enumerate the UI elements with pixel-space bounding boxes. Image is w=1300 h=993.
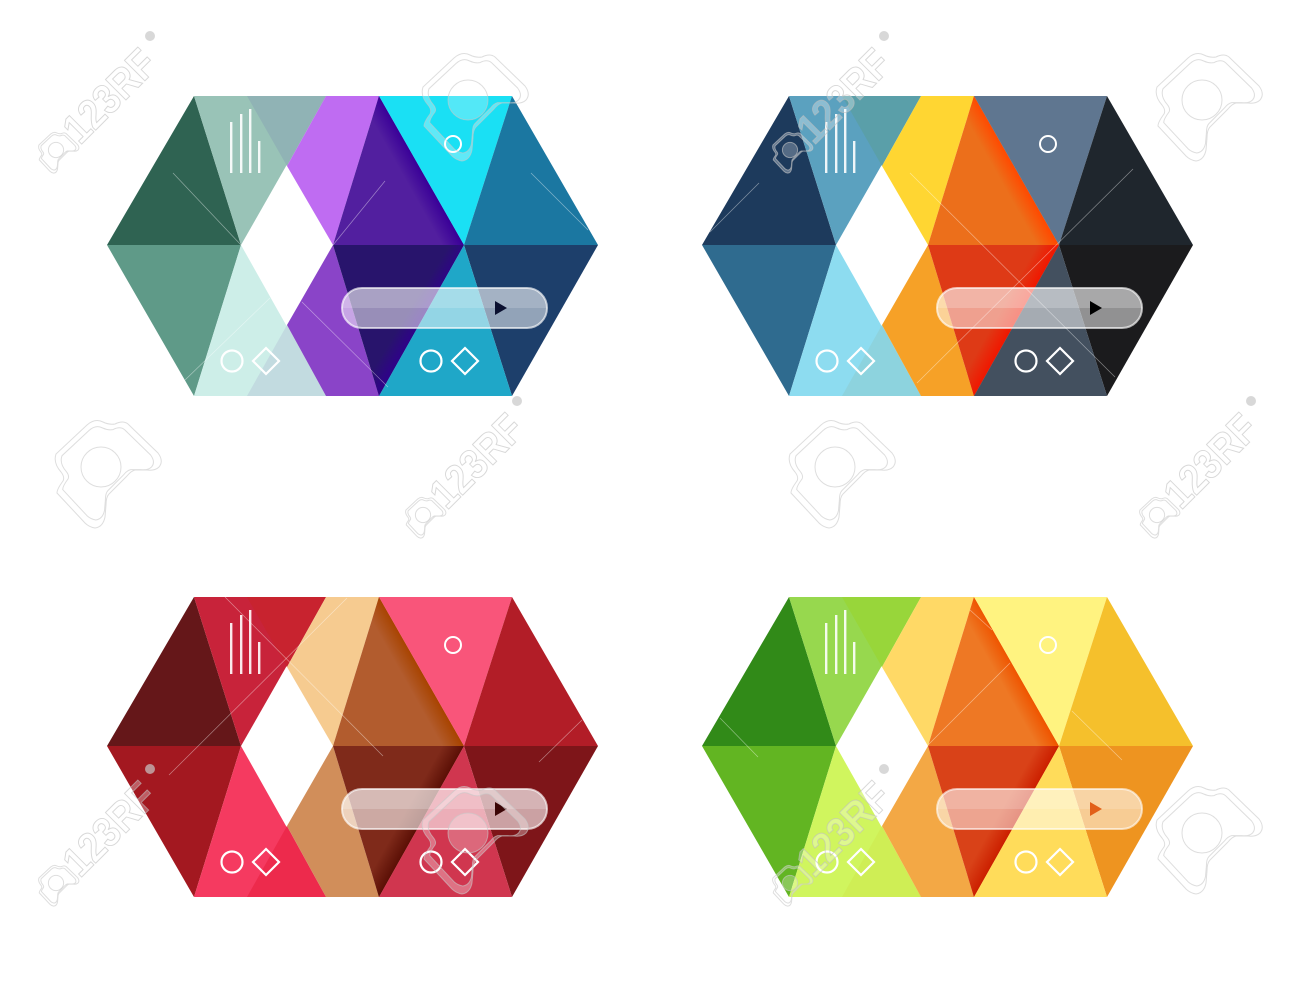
button: glass pill with play arrow: [937, 288, 1142, 328]
icon: small circle: [445, 637, 461, 653]
watermark: 123RF logo middle: 123RF: [420, 405, 533, 517]
icons: circle and diamond right: [1016, 849, 1073, 875]
panel: red and brown hexagon: [107, 597, 598, 897]
watermark: camera icon top middle: [422, 54, 528, 161]
icons: circle and diamond left: [816, 348, 874, 374]
centre facets: [882, 597, 1059, 897]
thin lines: [710, 169, 1133, 383]
watermark: 123RF logo bottom left: 123RF: [53, 773, 166, 885]
watermark: camera icon top right: [1156, 54, 1262, 161]
right facets: [974, 96, 1193, 396]
watermark: 123RF logo bottom centre: 123RF: [787, 773, 900, 885]
left facets: [702, 597, 921, 897]
right facets: [379, 597, 598, 897]
watermark: camera icon bottom middle: [422, 787, 528, 894]
left facets: [107, 597, 326, 897]
icon: small circle: [445, 136, 461, 152]
left facets: [702, 96, 921, 396]
watermark: 123RF logo top left: 123RF: [53, 40, 166, 152]
right facets: [379, 96, 598, 396]
thin lines: [720, 610, 1122, 760]
icons: circle and diamond left: [222, 849, 279, 875]
icon: bar chart: [825, 610, 855, 674]
watermark: camera icon middle centre: [789, 421, 895, 528]
centre facets: [287, 597, 464, 897]
watermark: camera icon bottom right: [1156, 787, 1262, 894]
button: glass pill with play arrow: [937, 789, 1142, 829]
icons: circle and diamond right: [1016, 348, 1073, 374]
panel: green and orange hexagon: [702, 597, 1193, 897]
panel: teal and purple hexagon: [107, 96, 598, 396]
centre facets: [882, 96, 1059, 396]
left facets: [107, 96, 326, 396]
panel: blue and orange hexagon: [702, 96, 1193, 396]
icons: circle and diamond right: [420, 348, 478, 374]
watermark: 123RF logo top centre: 123RF: [787, 40, 900, 152]
centre facets: [287, 96, 464, 396]
watermark: camera icon middle left: [55, 421, 161, 528]
watermark: 123RF logo middle right: 123RF: [1154, 405, 1267, 517]
icon: bar chart: [230, 610, 260, 674]
icons: circle and diamond left: [222, 348, 279, 374]
icons: circle and diamond right: [420, 849, 478, 875]
icon: bar chart: [825, 109, 855, 173]
right facets: [974, 597, 1193, 897]
icons: circle and diamond left: [816, 849, 874, 875]
thin lines: [173, 173, 588, 387]
icon: small circle: [1040, 136, 1056, 152]
thin lines: [169, 597, 582, 775]
icon: bar chart: [230, 109, 260, 173]
button: glass pill with play arrow: [342, 288, 547, 328]
button: glass pill with play arrow: [342, 789, 547, 829]
icon: small circle: [1040, 637, 1056, 653]
